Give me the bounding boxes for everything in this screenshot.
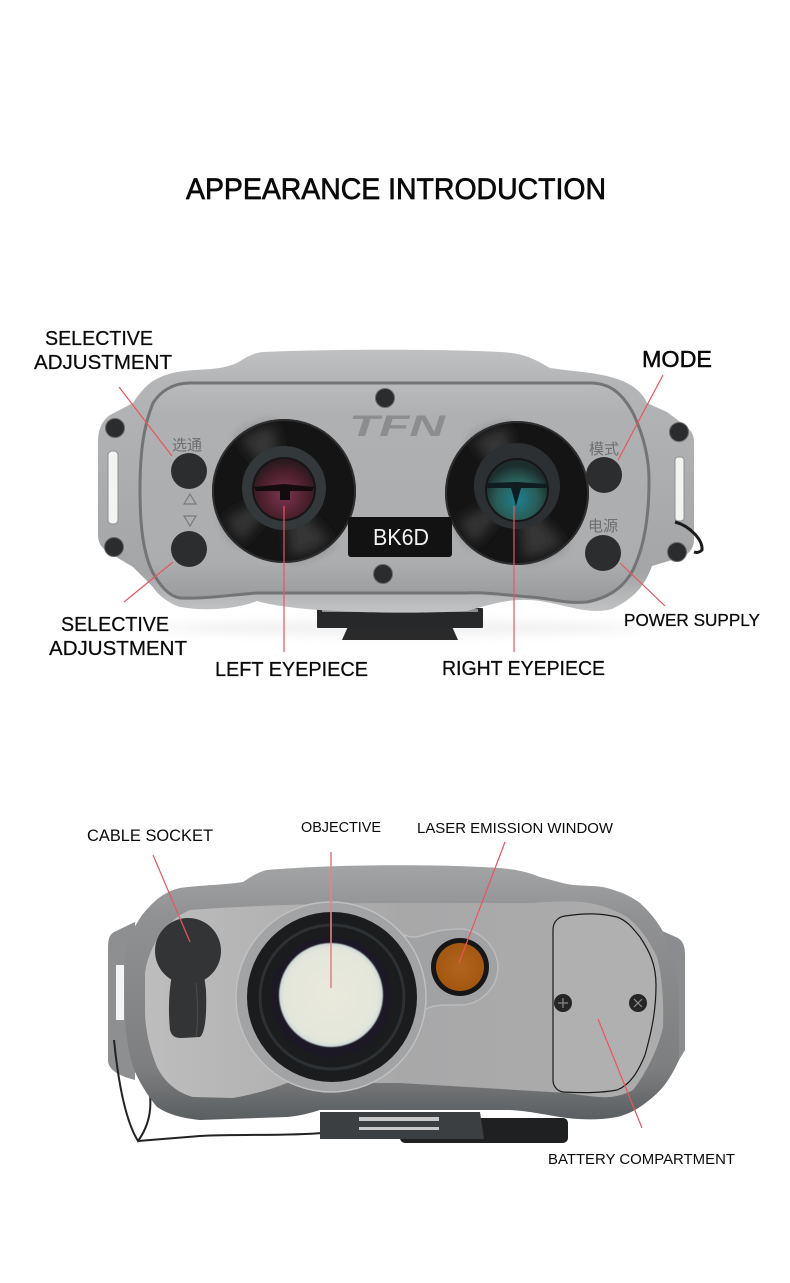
side wings bbox=[108, 922, 685, 1080]
labels bbox=[34, 327, 760, 1168]
model badge bbox=[348, 517, 452, 557]
lanyard loop bbox=[675, 522, 702, 552]
device: rear view bbox=[98, 350, 702, 640]
outer housing bbox=[98, 350, 694, 613]
label: selective adjustment top: ADJUSTMENT bbox=[34, 351, 172, 374]
label: right eyepiece: RIGHT EYEPIECE bbox=[442, 658, 605, 680]
label: mode: MODE bbox=[642, 346, 712, 372]
adjustment arrows bbox=[184, 494, 196, 526]
label: power supply: POWER SUPPLY bbox=[624, 610, 760, 630]
label: cable socket: CABLE SOCKET bbox=[87, 827, 213, 845]
battery compartment bbox=[553, 914, 656, 1093]
front panel bbox=[140, 383, 649, 602]
label: selective adjustment top: SELECTIVE bbox=[45, 327, 153, 350]
objective housing bbox=[236, 902, 498, 1092]
laser emission window bbox=[431, 938, 489, 996]
label: laser emission window: LASER EMISSION WINDOW bbox=[417, 820, 614, 837]
label: left eyepiece: LEFT EYEPIECE bbox=[215, 659, 368, 681]
objective lens bbox=[247, 912, 417, 1082]
lanyard cord bbox=[114, 1040, 322, 1141]
outer housing bbox=[125, 865, 679, 1120]
device: front view bbox=[108, 865, 685, 1143]
model badge: BK6D bbox=[373, 524, 429, 550]
right eyepiece bbox=[445, 421, 589, 565]
button captions bbox=[172, 437, 619, 535]
button captions: 选通 bbox=[172, 437, 202, 454]
label: selective adjustment bottom bbox=[49, 613, 187, 660]
label: battery compartment: BATTERY COMPARTMENT bbox=[548, 1151, 735, 1168]
mounting shoe bbox=[317, 608, 483, 640]
front face bbox=[145, 901, 663, 1098]
side slots bbox=[108, 451, 684, 524]
cable socket cap bbox=[155, 918, 221, 1038]
mount bbox=[320, 1112, 568, 1143]
ground shadow bbox=[160, 620, 640, 636]
screws bbox=[104, 388, 688, 584]
buttons bbox=[171, 453, 622, 571]
label: objective: OBJECTIVE bbox=[301, 819, 381, 836]
left eyepiece bbox=[212, 419, 356, 563]
button captions: 电源 bbox=[588, 518, 618, 535]
callout lines bbox=[119, 375, 665, 1128]
label: selective adjustment top bbox=[34, 327, 172, 374]
label: selective adjustment bottom: ADJUSTMENT bbox=[49, 637, 187, 660]
button captions: 模式 bbox=[589, 441, 619, 458]
title: APPEARANCE INTRODUCTION bbox=[186, 173, 606, 206]
label: selective adjustment bottom: SELECTIVE bbox=[61, 613, 169, 636]
brand logo: TFN bbox=[349, 410, 447, 443]
